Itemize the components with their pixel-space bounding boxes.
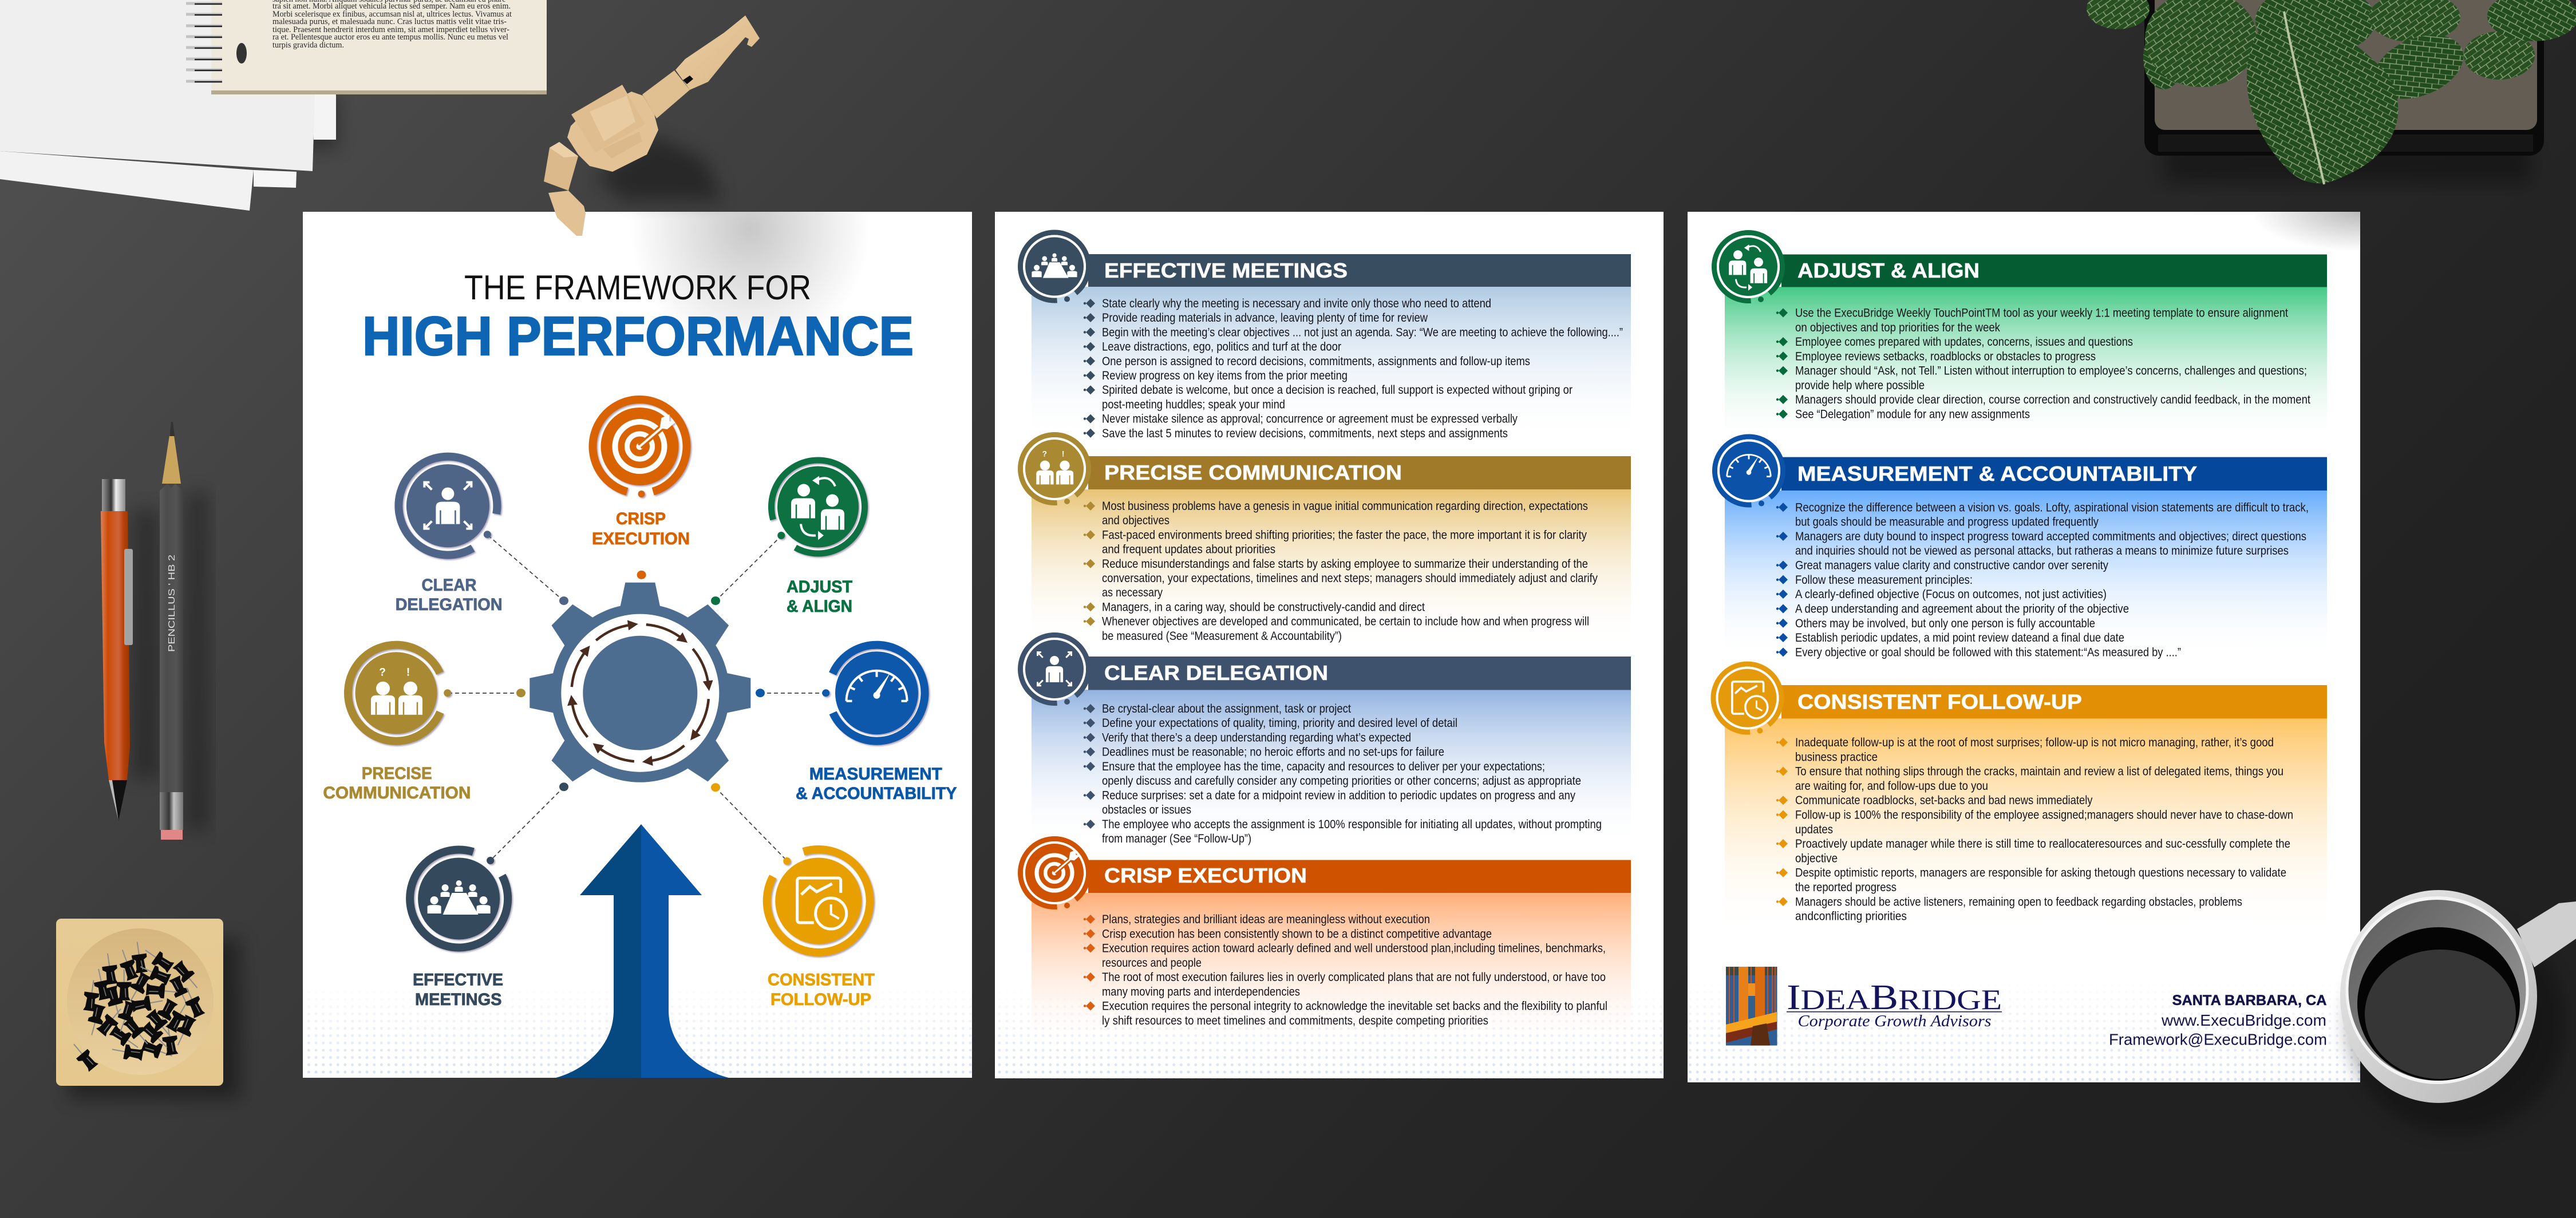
contact details: Framework@ExecuBridge.com — [2109, 1031, 2327, 1049]
section icon — [1018, 230, 1091, 303]
section: precise communication — [1018, 432, 1631, 647]
bullet text: Execution requires action toward aclearly defined and well understood plan,including timelines, benchmarks, — [1102, 941, 1606, 955]
bullet text: but goals should be measurable and progress updated frequently — [1795, 515, 2099, 529]
bullet text: Communicate roadblocks, set-backs and bad news immediately — [1795, 793, 2093, 807]
bullet text: be measured (See “Measurement & Accountability”) — [1102, 629, 1342, 643]
bullet text: on objectives and top priorities for the week — [1795, 321, 2000, 334]
bullet text: Never mistake silence as approval; concurrence or agreement must be expressed verbally — [1102, 412, 1518, 426]
section icon — [1711, 662, 1784, 734]
panel: page three — [1688, 212, 2360, 1082]
section icon — [1712, 434, 1785, 507]
label: crisp execution: EXECUTION — [592, 529, 690, 548]
bullet text: and inquiries should not be viewed as personal attacks, but ratheras a means to minimize future surprises — [1795, 544, 2289, 557]
gear cycle arrows — [562, 615, 718, 771]
section header bar — [1781, 254, 2327, 287]
label: precise communication: PRECISE — [362, 764, 432, 783]
bullet text: obstacles or issues — [1102, 802, 1191, 816]
notebook text: malesuada purus, et malesuada nunc. Cras luctus mattis velit vitae tris- — [272, 17, 507, 26]
bullet text — [1102, 499, 1598, 643]
bullet text: objective — [1795, 851, 1838, 865]
bullet text: Recognize the difference between a vision vs. goals. Lofty, aspirational vision statements are difficult to track, — [1795, 500, 2309, 514]
icon: adjust and align — [761, 449, 875, 564]
section heading: MEASUREMENT & ACCOUNTABILITY — [1797, 462, 2197, 485]
bullet markers — [1776, 503, 1788, 657]
plant pot — [2087, 0, 2576, 184]
section: consistent follow-up — [1711, 662, 2327, 937]
bullet text: The employee who accepts the assignment is 100% responsible for initiating all updates, without prompting — [1102, 817, 1602, 831]
icon: measurement and accountability — [813, 630, 940, 757]
gear — [530, 583, 750, 785]
pencil — [160, 422, 209, 840]
bullet text: updates — [1795, 822, 1833, 836]
label: crisp execution: CRISP — [616, 509, 666, 528]
bullet text: Plans, strategies and brilliant ideas are meaningless without execution — [1102, 912, 1430, 926]
pencil imprint: PENCILLUS ' HB 2 — [167, 555, 177, 652]
section: clear delegation — [1018, 632, 1631, 847]
label: effective meetings: MEETINGS — [415, 990, 501, 1009]
bullet text: Provide reading materials in advance, leaving plenty of time for review — [1102, 311, 1428, 325]
notebook text: ra et. Pellentesque auctor eros eu ante tempus mollis. Nunc eu metus vel — [272, 33, 508, 42]
bullet text: A clearly-defined objective (Focus on outcomes, not just activities) — [1795, 587, 2107, 601]
bullet text: Deadlines must be reasonable; no heroic efforts and no set-ups for failure — [1102, 745, 1444, 759]
bullet text: Despite optimistic reports, managers are responsible for asking thetough questions necessary to validate — [1795, 866, 2286, 880]
bullet markers — [1084, 915, 1095, 1011]
label: measurement and accountability: MEASUREMENT — [809, 765, 942, 784]
bullet text: Managers should be active listeners, remaining open to feedback regarding obstacles, problems — [1795, 895, 2242, 908]
bullet text: Spirited debate is welcome, but once a decision is reached, full support is expected without griping or — [1102, 383, 1573, 397]
logo: wordmark: IDEA BRIDGE — [1787, 978, 2002, 1017]
section icon — [1018, 632, 1091, 706]
bullet text: Great managers value clarity and constructive candor over serenity — [1795, 559, 2108, 572]
bullet text: To ensure that nothing slips through the cracks, maintain and review a list of delegated items, things you — [1795, 765, 2283, 778]
bullet text: Begin with the meeting’s clear objectives ... not just an agenda. Say: “We are meeting to achieve the following....” — [1102, 325, 1623, 339]
bullet markers — [1776, 738, 1788, 906]
bullet text: Verify that there’s a deep understanding regarding what’s expected — [1102, 730, 1411, 744]
section: measurement and accountability — [1712, 434, 2327, 659]
bullet text: Follow-up is 100% the responsibility of the employee assigned;managers should never have to chase-down — [1795, 808, 2293, 822]
label: precise communication: COMMUNICATION — [323, 784, 471, 802]
section icon — [1712, 230, 1785, 303]
section heading: ADJUST & ALIGN — [1797, 259, 1980, 282]
bullet text: conversation, your expectations, timelines and next steps; managers should immediately adjust and clarify — [1102, 571, 1598, 585]
bullet text: ly shift resources to meet timelines and commitments, despite competing priorities — [1102, 1014, 1488, 1027]
bullet text: Most business problems have a genesis in vague initial communication regarding direction, expectations — [1102, 499, 1588, 513]
label: effective meetings: EFFECTIVE — [413, 971, 503, 989]
bullet text: are waiting for, and follow-ups due to you — [1795, 779, 1988, 793]
logo: wordmark — [1787, 978, 2002, 1030]
bullet text: Reduce misunderstandings and false starts by asking employee to summarize their understanding of the — [1102, 557, 1588, 571]
label: consistent follow-up: FOLLOW-UP — [771, 990, 871, 1009]
growth arrow — [556, 824, 729, 1078]
icon: crisp execution — [582, 389, 698, 504]
icon: effective meetings — [393, 833, 525, 964]
bullet markers — [1084, 501, 1095, 626]
panel: page two — [995, 212, 1664, 1078]
icon: consistent follow-up — [754, 837, 883, 965]
bullet text: Fast-paced environments breed shifting priorities; the faster the pace, the more important it is for clarity — [1102, 528, 1587, 541]
bullet text: Use the ExecuBridge Weekly TouchPointTM tool as your weekly 1:1 meeting template to ensure alignment — [1795, 306, 2288, 319]
notebook text: tique. Praesent hendrerit interdum enim, sit amet imperdiet tellus viver- — [272, 25, 509, 34]
bullet text: business practice — [1795, 750, 1878, 764]
section header bar — [1088, 657, 1631, 690]
bullet text: as necessary — [1102, 586, 1163, 599]
label: measurement and accountability: & ACCOUNTABILITY — [796, 784, 957, 803]
bullet text: Review progress on key items from the prior meeting — [1102, 369, 1348, 382]
bullet text: Employee comes prepared with updates, concerns, issues and questions — [1795, 335, 2133, 349]
bullet markers — [1084, 299, 1095, 438]
bullet text: Every objective or goal should be followed with this statement:“As measured by ....” — [1795, 645, 2181, 659]
notebook text: Morbi scelerisque ex finibus, accumsan nisl at, ultrices lectus. Vivamus at — [272, 10, 512, 19]
dashed connectors — [448, 535, 826, 861]
bullet text: Be crystal-clear about the assignment, task or project — [1102, 702, 1351, 715]
bullet text: Establish periodic updates, a mid point review dateand a final due date — [1795, 631, 2124, 644]
bullet text — [1102, 296, 1623, 440]
bullet text: Employee reviews setbacks, roadblocks or obstacles to progress — [1795, 349, 2096, 363]
bullet text: resources and people — [1102, 956, 1202, 970]
section header bar — [1088, 456, 1631, 489]
section icon — [1018, 836, 1091, 909]
bullet text — [1102, 702, 1602, 845]
title line two: HIGH PERFORMANCE — [362, 306, 914, 367]
logo: wordmark: Corporate Growth Advisors — [1797, 1013, 1992, 1030]
bullet text: Ensure that the employee has the time, capacity and resources to deliver per your expectations; — [1102, 760, 1545, 773]
bullet text: and frequent updates about priorities — [1102, 543, 1275, 556]
bullet markers — [1776, 308, 1788, 419]
gear connector dots — [516, 571, 765, 792]
bullet text: provide help where possible — [1795, 378, 1925, 392]
notebook text — [272, 0, 512, 50]
bullet text: Whenever objectives are developed and communicated, be certain to include how and when progress will — [1102, 615, 1589, 628]
label: precise communication — [323, 764, 471, 802]
section: adjust and align — [1712, 230, 2327, 445]
bullet text: Proactively update manager while there is still time to reallocateresources and suc-cessfully complete the — [1795, 837, 2290, 851]
contact details: SANTA BARBARA, CA — [2172, 992, 2327, 1009]
paper sheets — [0, 0, 338, 211]
bullet text: andconflicting priorities — [1795, 909, 1907, 923]
contact details — [2109, 992, 2327, 1049]
label: consistent follow-up — [768, 971, 875, 1009]
bullet text: post-meeting huddles; speak your mind — [1102, 397, 1285, 411]
bullet text: Others may be involved, but only one person is fully accountable — [1795, 616, 2095, 630]
section icon — [1018, 432, 1091, 505]
bullet text: Managers, in a caring way, should be constructively-candid and direct — [1102, 600, 1425, 614]
bullet text: One person is assigned to record decisions, commitments, assignments and follow-up items — [1102, 354, 1530, 368]
bullet text: Follow these measurement principles: — [1795, 573, 1973, 587]
spiral notebook — [186, 0, 547, 94]
bullet text: State clearly why the meeting is necessary and invite only those who need to attend — [1102, 296, 1491, 310]
bullet text: Reduce surprises: set a date for a midpoint review in addition to periodic updates on progress and any — [1102, 789, 1575, 802]
title line one: THE FRAMEWORK FOR — [464, 268, 811, 307]
label: adjust and align — [787, 578, 852, 616]
section: crisp execution — [1018, 836, 1631, 1053]
bullet text: Save the last 5 minutes to review decisions, commitments, next steps and assignments — [1102, 426, 1508, 440]
bullet text — [1102, 912, 1607, 1027]
section heading: CLEAR DELEGATION — [1104, 661, 1328, 685]
bullet text — [1795, 306, 2310, 421]
section heading: CRISP EXECUTION — [1104, 864, 1307, 887]
notebook text: turpis gravida dictum. — [272, 41, 344, 50]
bullet text: openly discuss and carefully consider any competing priorities or other concerns; adjust as appropriate — [1102, 774, 1581, 788]
label: measurement and accountability — [796, 765, 957, 803]
wooden tray with push pins — [56, 919, 240, 1099]
section: effective meetings — [1018, 230, 1631, 442]
bullet text: the reported progress — [1795, 880, 1897, 894]
section heading: EFFECTIVE MEETINGS — [1104, 259, 1348, 282]
notebook spiral rings — [186, 3, 222, 82]
label: adjust and align: ADJUST — [787, 578, 852, 596]
section header bar — [1781, 457, 2327, 491]
bullet text: and objectives — [1102, 513, 1170, 527]
icon: precise communication — [333, 630, 460, 757]
bullet text: Crisp execution has been consistently shown to be a distinct competitive advantage — [1102, 927, 1492, 940]
label: clear delegation — [396, 576, 503, 614]
label: consistent follow-up: CONSISTENT — [768, 971, 875, 989]
bullet text: Leave distractions, ego, politics and turf at the door — [1102, 340, 1341, 354]
bullet markers — [1084, 704, 1095, 829]
bullet text: Manager should “Ask, not Tell.” Listen without interruption to employee’s concerns, challenges and questions; — [1795, 364, 2307, 378]
bullet text — [1795, 500, 2309, 659]
bullet text: Managers should provide clear direction, course correction and constructively candid feedback, in the moment — [1795, 393, 2310, 406]
coffee mug — [2340, 890, 2576, 1133]
bullet text: from manager (See “Follow-Up”) — [1102, 832, 1251, 845]
bullet text — [1795, 735, 2293, 923]
plant leaves — [2087, 0, 2576, 183]
notebook text: tra sit amet. Morbi aliquet vehicula lectus sed semper. Nam eu eros enim. — [272, 2, 511, 11]
label: effective meetings — [413, 971, 503, 1009]
bullet text: The root of most execution failures lies in overly complicated plans that are not fully understood, or have too — [1102, 970, 1606, 984]
bullet text: Define your expectations of quality, timing, priority and desired level of detail — [1102, 716, 1457, 730]
pen — [101, 479, 160, 821]
bullet text: Managers are duty bound to inspect progress toward accepted commitments and objectives; direct questions — [1795, 529, 2306, 543]
section heading: CONSISTENT FOLLOW-UP — [1797, 690, 2082, 713]
section header bar — [1781, 685, 2327, 718]
label: adjust and align: & ALIGN — [787, 597, 852, 616]
bullet text: See “Delegation” module for any new assignments — [1795, 408, 2030, 421]
label: crisp execution — [592, 509, 690, 548]
panel: framework page — [303, 212, 972, 1078]
icon: clear delegation — [381, 438, 515, 573]
wooden mannequin — [544, 15, 760, 236]
bullet text: Execution requires the personal integrity to acknowledge the inevitable set backs and the flexibility to planful — [1102, 999, 1607, 1013]
logo: bridge photo — [1726, 967, 1777, 1046]
bullet text: many moving parts and interdependencies — [1102, 984, 1300, 998]
section header bar — [1088, 860, 1631, 893]
section header bar — [1088, 254, 1631, 287]
label: clear delegation: DELEGATION — [396, 595, 503, 614]
section heading: PRECISE COMMUNICATION — [1104, 461, 1402, 484]
bullet text: A deep understanding and agreement about the priority of the objective — [1795, 602, 2129, 616]
contact details: www.ExecuBridge.com — [2161, 1011, 2326, 1029]
label: clear delegation: CLEAR — [421, 576, 477, 595]
bullet text: Inadequate follow-up is at the root of most surprises; follow-up is not micro managing, rather, it’s good — [1795, 735, 2274, 749]
